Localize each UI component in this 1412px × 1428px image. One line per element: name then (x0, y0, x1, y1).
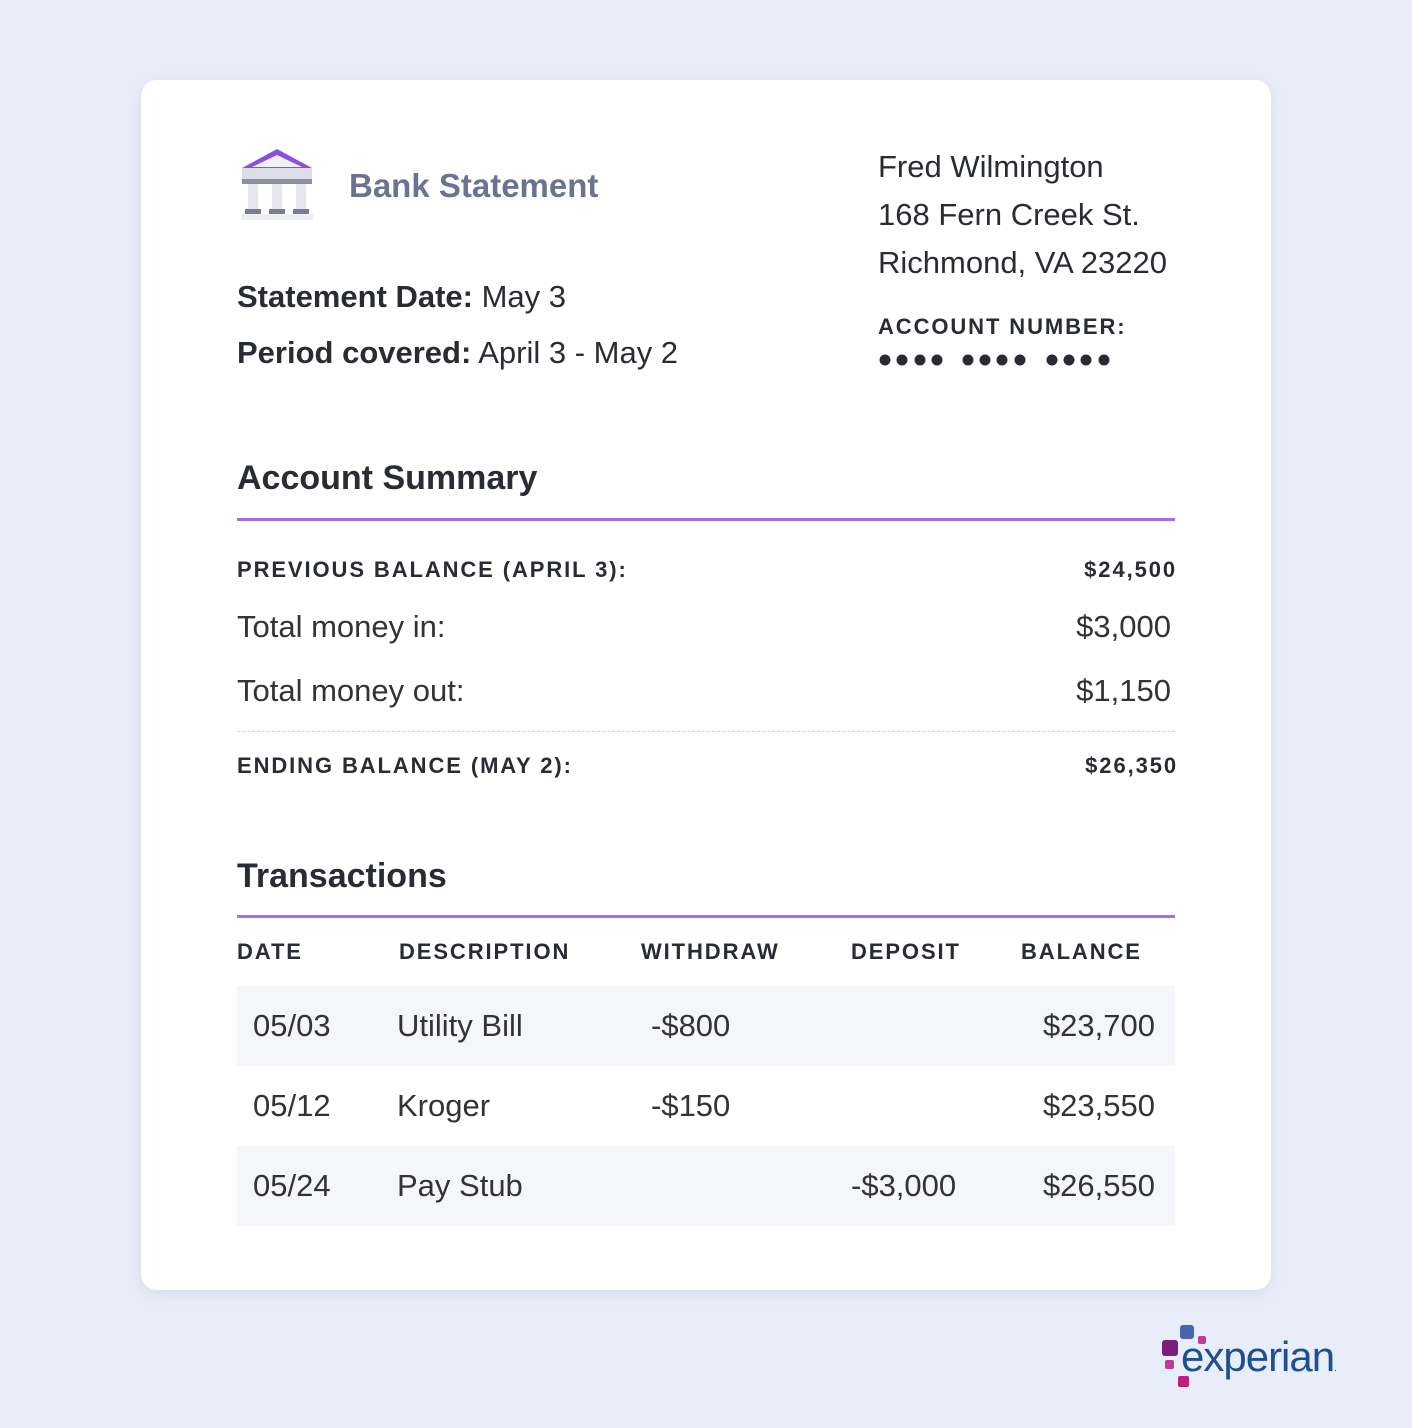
table header: DEPOSIT (851, 939, 961, 964)
summary: money in: $3,000 (1076, 609, 1171, 644)
icon: bank (241, 149, 313, 220)
table header (237, 939, 1142, 964)
summary: ending balance: $26,350 (1085, 753, 1178, 778)
text: address (878, 149, 1167, 280)
table row 3 (237, 1146, 1175, 1226)
heading: Account Summary: Account Summary (237, 459, 537, 497)
text: address: 168 Fern Creek St. (878, 197, 1140, 232)
table header: DESCRIPTION (399, 939, 570, 964)
summary: money out: $1,150 (1076, 673, 1171, 708)
table header: WITHDRAW (641, 939, 780, 964)
table header: DATE (237, 939, 303, 964)
heading: Bank Statement: Bank Statement (349, 167, 598, 204)
table row 1 (237, 986, 1175, 1066)
table header: BALANCE (1021, 939, 1142, 964)
summary: previous balance: PREVIOUS BALANCE (APRIL 3): (237, 557, 628, 582)
label: account number: ACCOUNT NUMBER: (878, 314, 1126, 339)
summary: previous balance (237, 557, 1177, 582)
summary: money out (237, 673, 1171, 708)
table row 1: Utility Bill (397, 1008, 523, 1043)
logo: experian (1162, 1325, 1336, 1387)
table row 3: Pay Stub (397, 1168, 523, 1203)
summary: previous balance: $24,500 (1084, 557, 1177, 582)
heading: Transactions: Transactions (237, 857, 447, 895)
table row 3: $26,550 (1043, 1168, 1155, 1203)
table row 2: -$150 (651, 1088, 730, 1123)
icon: masked account dots (880, 354, 1110, 366)
summary: ending balance: ENDING BALANCE (MAY 2): (237, 753, 573, 778)
table row 2: $23,550 (1043, 1088, 1155, 1123)
table row 1: -$800 (651, 1008, 730, 1043)
table row 2 (253, 1088, 1155, 1123)
text: address: Fred Wilmington (878, 149, 1104, 184)
table row 3: 05/24 (253, 1168, 331, 1203)
summary: ending balance (237, 753, 1178, 778)
table row 1: 05/03 (253, 1008, 331, 1043)
table row 2: Kroger (397, 1088, 490, 1123)
text: period covered: Period covered: April 3 - May 2 (237, 335, 678, 370)
panel: statement card (141, 80, 1271, 1290)
text: statement date: Statement Date: May 3 (237, 279, 566, 314)
text: address: Richmond, VA 23220 (878, 245, 1167, 280)
table row 3: -$3,000 (851, 1168, 956, 1203)
table row 1: $23,700 (1043, 1008, 1155, 1043)
logo: experian: experian. (1181, 1333, 1336, 1380)
summary: money in: Total money in: (237, 609, 446, 644)
summary: money in (237, 609, 1171, 644)
table row 2: 05/12 (253, 1088, 331, 1123)
summary: money out: Total money out: (237, 673, 464, 708)
